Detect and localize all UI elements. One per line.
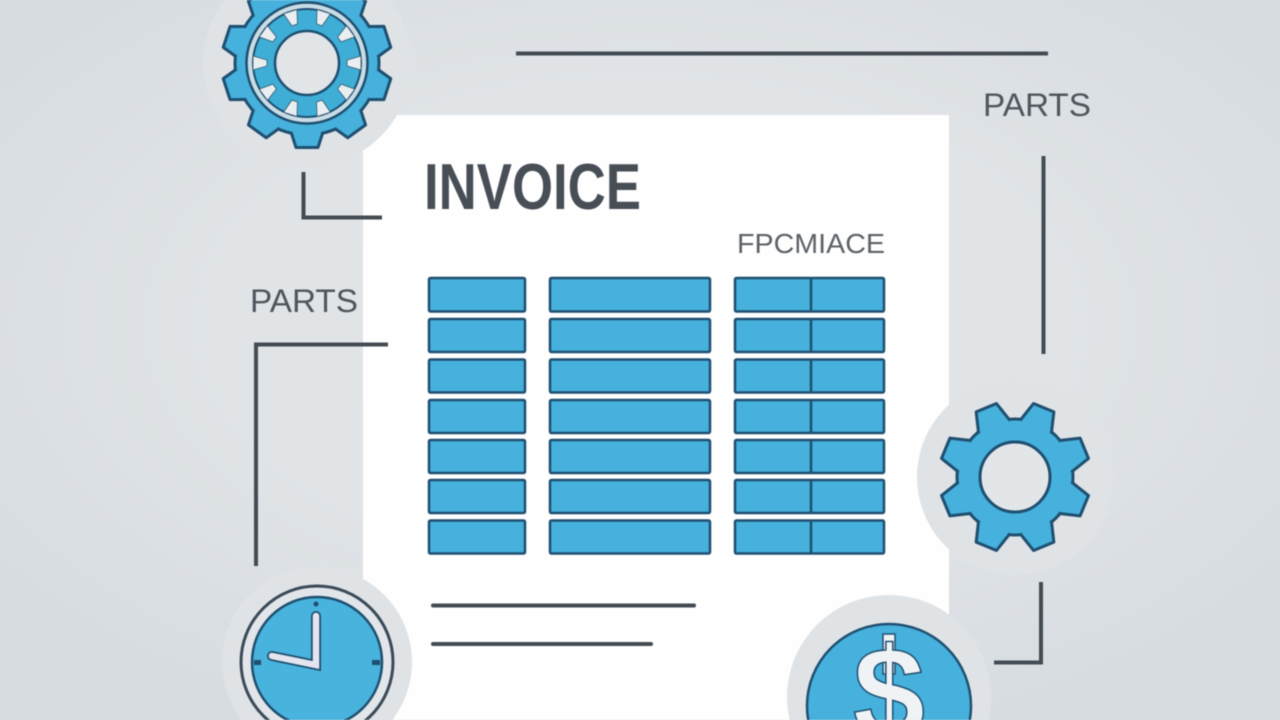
- icon: clock: [241, 586, 393, 720]
- label: parts right: PARTS: [983, 87, 1091, 123]
- icon: dollar coin: [807, 620, 971, 720]
- invoice table: [429, 278, 884, 554]
- icon: gear right: [939, 401, 1091, 553]
- halos behind icons: [203, 0, 1113, 720]
- invoice paper: [363, 115, 949, 720]
- icon: large gear top left: [222, 0, 392, 148]
- label: parts left: PARTS: [250, 283, 358, 319]
- invoice title: INVOICE: [424, 150, 641, 223]
- garbled column heading: FPCMIACE: [737, 228, 885, 259]
- connector lines: [256, 54, 1048, 662]
- invoice footer lines: [433, 606, 694, 644]
